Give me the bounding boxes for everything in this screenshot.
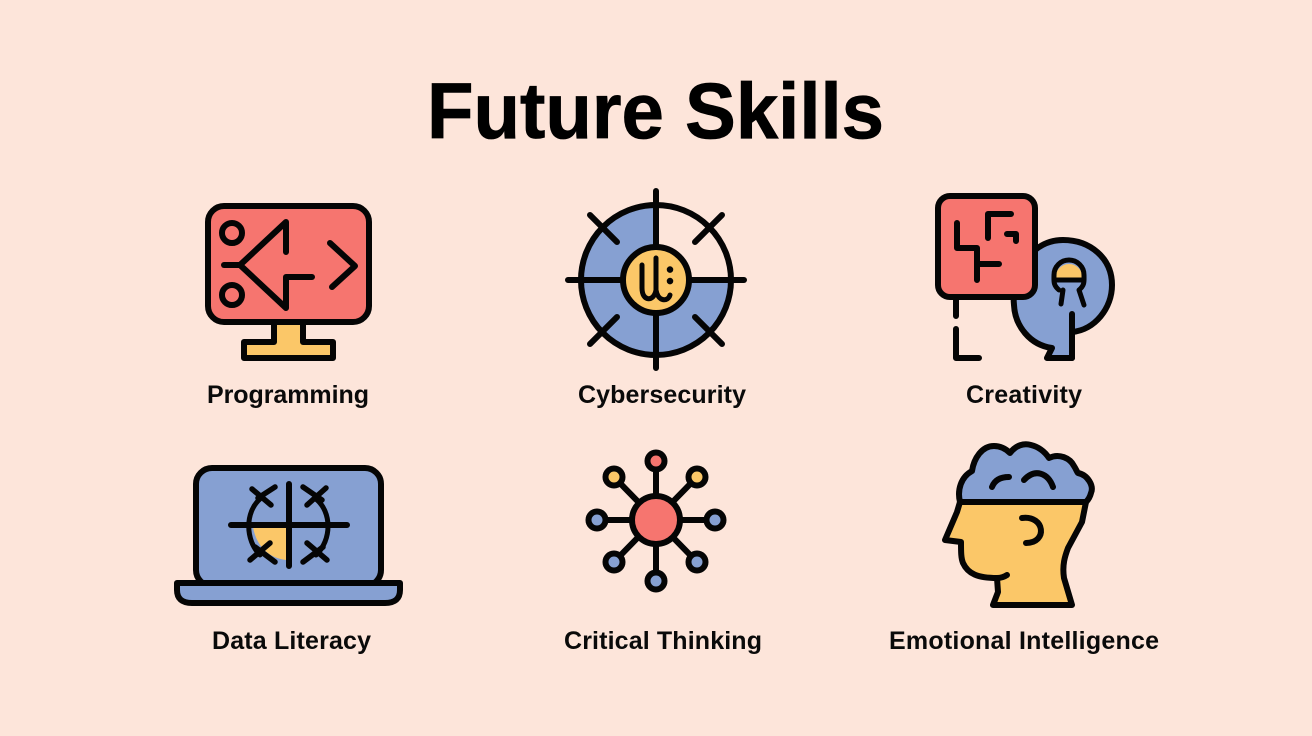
label: emotional intelligence: Emotional Intelligence <box>889 627 1159 655</box>
icon: puzzle board and head <box>938 196 1112 358</box>
label: critical thinking: Critical Thinking <box>564 627 762 655</box>
icon: monitor with code <box>208 206 369 358</box>
panel: emotional intelligence <box>889 444 1159 655</box>
panel: critical thinking <box>564 452 762 655</box>
panel: data literacy <box>177 468 400 655</box>
title: Future Skills <box>427 66 884 155</box>
panel: creativity <box>938 196 1112 409</box>
label: data literacy: Data Literacy <box>212 627 371 655</box>
icon: security target <box>568 191 744 368</box>
icon: head with brain <box>945 444 1092 605</box>
icon: laptop with chart <box>177 468 400 603</box>
icon: node network <box>588 452 724 590</box>
panel: cybersecurity <box>568 191 746 409</box>
label: programming: Programming <box>207 381 369 409</box>
label: creativity: Creativity <box>966 381 1082 409</box>
label: cybersecurity: Cybersecurity <box>578 381 746 409</box>
panel: programming <box>207 206 369 409</box>
